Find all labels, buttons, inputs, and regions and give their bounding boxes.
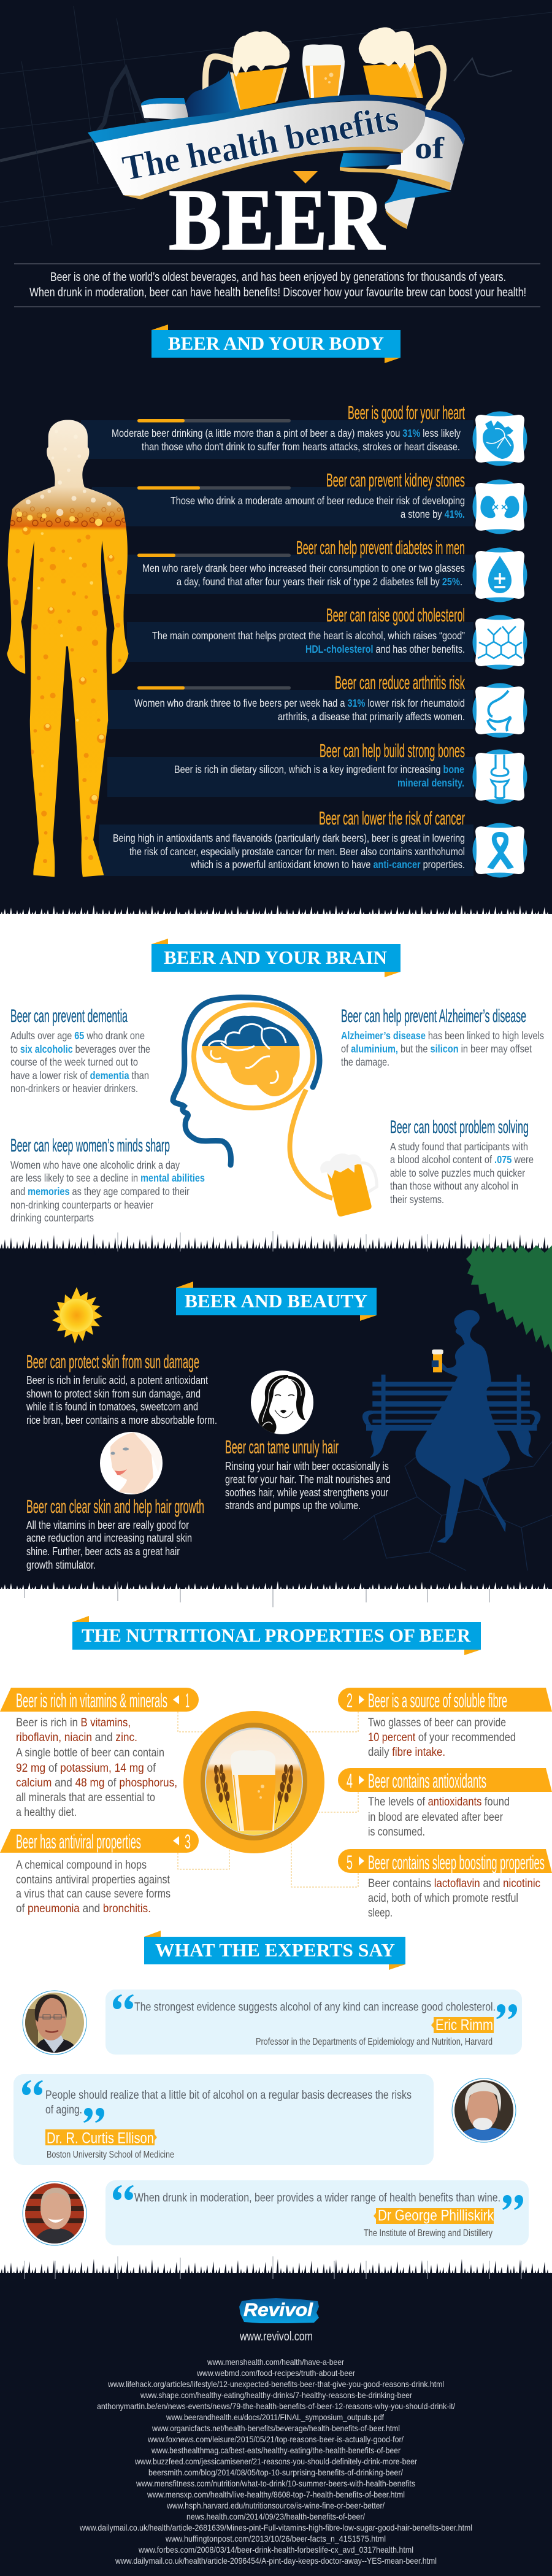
expert 2 quote: Dr. R. Curtis Ellison — [47, 2130, 154, 2147]
brain text: problem solving: a blood alcohol content of .075 were — [390, 1153, 534, 1166]
beauty text: hair: Beer can tame unruly hair — [225, 1436, 339, 1458]
label 1: vitamins and minerals: Beer is rich in vitamins & minerals — [16, 1690, 167, 1712]
nutrition text 3: of pneumonia and bronchitis. — [16, 1902, 151, 1915]
row 3: diabetes: a day, found that after four years their risk of type 2 diabetes fell by 25%. — [177, 575, 462, 588]
beauty text: sun damage: Beer can protect skin from sun damage — [26, 1351, 199, 1372]
title: The health benefits: The health benefits — [119, 98, 402, 188]
title: BEER: BEER — [169, 171, 386, 268]
revivol logo — [239, 2298, 319, 2323]
nutrition text 1: calcium and 48 mg of phosphorus, — [16, 1776, 177, 1790]
brain text: dementia: course of the week turned out to — [10, 1056, 138, 1068]
title: of: of — [415, 131, 445, 165]
divider thin spikes — [25, 2256, 521, 2279]
head outline yellow — [194, 1005, 332, 1198]
head outline blue — [173, 998, 320, 1165]
nutrition text 2: daily fibre intake. — [368, 1745, 445, 1759]
row 3: diabetes: Men who rarely drank beer who increased their consumption to one or two glasses — [142, 562, 465, 574]
connector lines — [178, 1712, 358, 1887]
title ribbon — [88, 71, 465, 229]
nutrition text 5: acid, both of which promote restful — [368, 1891, 518, 1905]
icon: heart — [472, 411, 527, 466]
brain text: dementia: to six alcoholic beverages over the — [10, 1043, 150, 1055]
label 3: antiviral: Beer has antiviral properties — [16, 1831, 141, 1853]
ribbon left fold — [141, 71, 240, 121]
references list: anthonymartin.be/en/news-events/news/79-the-health-benefits-of-beer-12-reasons-why-you-should-drink-it/ — [97, 2401, 455, 2411]
beauty text: hair: soothes hair, while yeast strengthens your — [225, 1486, 388, 1499]
nutrition text 1: all minerals that are essential to — [16, 1791, 155, 1804]
nutrition text 1: A single bottle of beer can contain — [16, 1746, 164, 1759]
icon: woman with wavy hair — [251, 1371, 313, 1434]
row 1: heart: than those who don't drink to suffer from hearts attacks, strokes or heart disease. — [142, 440, 460, 453]
beauty text: sun damage: Beer is rich in ferulic acid, a potent antioxidant — [26, 1374, 208, 1386]
woman — [415, 1310, 510, 1543]
nutrition text 4: is consumed. — [368, 1825, 425, 1839]
section heading: beer and beauty — [176, 1282, 377, 1321]
section heading: beer and your body — [151, 325, 401, 363]
references list: www.mensfitness.com/nutrition/what-to-drink/10-summer-beers-with-health-benefits — [136, 2478, 415, 2488]
brain text: women's minds — [10, 1136, 205, 1224]
row 4: cholesterol: HDL-cholesterol and has other benefits. — [305, 643, 465, 655]
beer mugs — [205, 27, 443, 112]
row 5: arthritis: arthritis, a disease that primarily affects women. — [278, 710, 465, 723]
icon: woman's clear skin — [100, 1429, 163, 1494]
section heading: nutritional properties — [72, 1616, 481, 1655]
beauty text: clear skin: acne reduction and increasing natural skin — [26, 1532, 192, 1544]
label 1: vitamins and minerals: 1 — [185, 1690, 190, 1712]
expert 3 photo — [23, 2182, 86, 2247]
expert 3 quote: The Institute of Brewing and Distillery — [364, 2228, 493, 2239]
nutrition text 3: contains antiviral properties against — [16, 1873, 170, 1886]
references list: www.menshealth.com/health/have-a-beer — [207, 2357, 344, 2367]
label 4: antioxidants: 4 — [347, 1770, 353, 1792]
ribbon right tail — [340, 109, 465, 229]
references list: www.lifehack.org/articles/lifestyle/12-unexpected-benefits-beer-that-give-you-good-reasons-drink.html — [107, 2379, 444, 2389]
heartbeat background — [0, 6, 552, 245]
row 1: heart: Moderate beer drinking (a little more than a pint of beer a day) makes you 31% less likely — [112, 427, 461, 439]
brain text: alzheimer's: of aluminium, but the silicon in beer may offset — [341, 1043, 532, 1055]
beauty text: clear skin: Beer can clear skin and help hair growth — [26, 1496, 204, 1517]
row 7: cancer: the risk of cancer, especially prostate cancer for men. Beer also contains xanthohumol — [129, 845, 465, 858]
brain text: women's minds: are less likely to see a decline in mental abilities — [10, 1172, 205, 1184]
row 3: diabetes — [137, 537, 465, 588]
icon: molecule — [472, 615, 527, 670]
tree foliage — [466, 1245, 552, 1353]
expert 2 photo — [452, 2078, 516, 2144]
references list: news.health.com/2014/09/23/health-benefits-of-beer/ — [186, 2512, 365, 2521]
bench — [362, 1375, 540, 1458]
expert 2 quote: People should realize that a little bit of alcohol on a regular basis decreases the risks — [45, 2089, 412, 2102]
brain text: dementia: Adults over age 65 who drank one — [10, 1029, 145, 1042]
references list: www.organicfacts.net/health-benefits/beverage/health-benefits-of-beer.html — [151, 2423, 400, 2433]
references list: beersmith.com/blog/2014/08/05/top-10-surprising-benefits-of-drinking-beer/ — [148, 2467, 403, 2477]
torn divider 2 — [0, 1234, 552, 1257]
section heading: beer and your body: BEER AND YOUR BODY — [168, 333, 384, 354]
row 2: kidney stones: Those who drink a moderate amount of beer reduce their risk of developing — [171, 494, 465, 507]
expert 2 quote — [13, 2074, 434, 2165]
beauty text: hair: strands and pumps up the volume. — [225, 1499, 361, 1512]
beauty text: hair — [225, 1436, 391, 1512]
head and brain graphic — [173, 998, 332, 1198]
left mug — [205, 31, 289, 110]
brain text: problem solving: their systems. — [390, 1193, 444, 1205]
brain text: dementia: non-drinkers or heavier drinkers. — [10, 1082, 138, 1094]
references list: www.webmd.com/food-recipes/truth-about-beer — [196, 2368, 355, 2378]
section heading: nutritional properties: THE NUTRITIONAL PROPERTIES OF BEER — [82, 1624, 471, 1646]
wheat ears — [214, 1764, 293, 1823]
row 7: cancer: which is a powerful antioxidant known to have anti-cancer properties. — [190, 858, 465, 871]
nutrition text 1: 92 mg of potassium, 14 mg of — [16, 1761, 156, 1775]
brain text: problem solving: A study found that participants with — [390, 1140, 528, 1153]
brain text: problem solving — [390, 1117, 534, 1205]
beauty text: sun damage: while it is found in tomatoes, sweetcorn and — [26, 1401, 198, 1413]
nutrition text 3 — [16, 1858, 171, 1915]
expert 3 quote — [105, 2180, 529, 2245]
divider thin spikes — [118, 1231, 489, 1251]
brain text: dementia: Beer can prevent dementia — [10, 1006, 128, 1026]
row 2: kidney stones — [137, 469, 465, 520]
label 3: antiviral — [0, 1829, 199, 1853]
expert 3 quote: Dr George Philliskirk — [378, 2207, 494, 2224]
beer glass — [231, 1750, 275, 1831]
label 2: soluble fibre: 2 — [347, 1690, 353, 1712]
ribbon gold edge — [123, 147, 403, 199]
references list: www.mensxp.com/health/live-healthy/8608-top-7-health-benefits-of-beer.html — [147, 2489, 405, 2499]
intro text — [14, 263, 540, 307]
row 4: cholesterol: The main component that helps protect the heart is alcohol, which raises “good” — [152, 629, 465, 642]
brain text: problem solving: able to solve puzzles much quicker — [390, 1167, 525, 1179]
references list: www.huffingtonpost.com/2013/10/26/beer-facts_n_4151575.html — [165, 2534, 386, 2543]
brain text: alzheimer's: the damage. — [341, 1056, 389, 1068]
nutrition text 1 — [16, 1716, 177, 1819]
label 3: antiviral: 3 — [185, 1831, 191, 1853]
beauty text: sun damage: shown to protect skin from sun damage, and — [26, 1388, 201, 1400]
expert 1 quote: Eric Rimm — [435, 2017, 493, 2034]
brain text: dementia — [10, 1006, 150, 1094]
nutrition text 5: sleep. — [368, 1906, 393, 1920]
nutrition text 1: riboflavin, niacin and zinc. — [16, 1731, 137, 1744]
row 7: cancer: Being high in antioxidants and flavanoids (particularly dark beers), beer is great in lowering — [113, 832, 465, 844]
brain text: alzheimer's — [341, 1006, 544, 1068]
row 6: bones — [174, 740, 465, 789]
expert 1 quote — [105, 1990, 522, 2055]
row 5: arthritis — [134, 672, 465, 723]
nutrition text 2: 10 percent of your recommended — [368, 1731, 516, 1744]
brain text: women's minds: drinking counterparts — [10, 1212, 94, 1224]
references list: www.hsph.harvard.edu/nutritionsource/is-wine-fine-or-beer-better/ — [166, 2501, 385, 2510]
website url: www.revivol.com — [239, 2330, 313, 2343]
section heading: beer and beauty: BEER AND BEAUTY — [185, 1290, 367, 1312]
beauty text: hair: Rinsing your hair with beer occasionally is — [225, 1460, 389, 1472]
orange triangle — [293, 171, 318, 183]
ground cracks — [343, 1436, 552, 1571]
icon: sun — [52, 1287, 102, 1344]
references list: www.buzzfeed.com/jessicamisener/21-reasons-you-should-definitely-drink-more-beer — [134, 2456, 417, 2466]
row 6: bones: Beer is rich in dietary silicon, which is a key ingredient for increasing bone — [174, 763, 464, 775]
expert 1 photo — [23, 1991, 86, 2055]
expert 1 quote: Professor in the Departments of Epidemiology and Nutrition, Harvard — [256, 2037, 493, 2047]
section heading: beer and your brain: BEER AND YOUR BRAIN — [164, 947, 387, 968]
nutrition text 1: a healthy diet. — [16, 1805, 77, 1819]
references list: www.shape.com/healthy-eating/healthy-drinks/7-healthy-reasons-be-drinking-beer — [140, 2390, 412, 2400]
icon: kidneys — [472, 480, 527, 534]
row 4: cholesterol — [152, 604, 465, 655]
icon: small beer mug — [318, 1147, 383, 1218]
row 5: arthritis: Women who drank three to five beers per week had a 31% lower risk for rheumatoid — [134, 697, 465, 709]
section heading: what the experts say — [144, 1931, 405, 1970]
section heading: what the experts say: WHAT THE EXPERTS SAY — [155, 1939, 395, 1961]
expert 2 quote: Boston University School of Medicine — [47, 2150, 174, 2160]
nutrition text 5: Beer contains lactoflavin and nicotinic — [368, 1877, 540, 1890]
rows background bands — [81, 420, 473, 876]
beauty text: sun damage: rice bran, beer contains a more absorbable form. — [26, 1414, 217, 1426]
references list — [79, 2357, 472, 2566]
beauty text: hair: great for your hair. The malt nourishes and — [225, 1474, 391, 1486]
torn divider 3 — [0, 1581, 552, 1594]
human body silhouette filled with beer — [7, 420, 129, 877]
row 1: heart — [112, 402, 465, 453]
references list: www.forbes.com/2008/03/14/beer-drink-health-forbeslife-cx_avd_0317health.html — [138, 2545, 413, 2555]
expert 2 quote: of aging. — [45, 2104, 82, 2117]
nutrition text 4: in blood are elevated after beer — [368, 1810, 503, 1824]
nutrition text 2: Two glasses of beer can provide — [368, 1716, 506, 1729]
nutrition text 3: a virus that can cause severe forms — [16, 1887, 171, 1901]
references list: www.beerandhealth.eu/docs/2011/FINAL_symposium_outputs.pdf — [166, 2412, 384, 2422]
brain text: women's minds: Beer can keep women’s minds sharp — [10, 1136, 170, 1156]
torn divider 4 — [0, 2259, 552, 2282]
ribbon main white strip — [95, 100, 425, 199]
references list: www.besthealthmag.ca/best-eats/healthy-eating/the-health-benefits-of-beer — [151, 2445, 401, 2455]
section heading: beer and your brain — [151, 939, 401, 977]
bench and woman silhouette — [362, 1310, 540, 1543]
nutrition text 4: The levels of antioxidants found — [368, 1795, 510, 1809]
divider thin spikes — [25, 1582, 489, 1607]
row 7: cancer — [113, 807, 465, 871]
brain text: dementia: have a lower risk of dementia than — [10, 1069, 149, 1082]
brain text: problem solving: than those without any alcohol in — [390, 1180, 518, 1192]
nutrition text 5 — [368, 1877, 540, 1920]
centre glass — [302, 44, 345, 98]
nutrition text 1: Beer is rich in B vitamins, — [16, 1716, 131, 1729]
revivol logo: Revivol — [243, 2300, 313, 2320]
brain text: women's minds: Women who have one alcoholic drink a day — [10, 1159, 180, 1171]
label 1: vitamins and minerals — [0, 1688, 199, 1712]
right mug — [359, 27, 443, 112]
icon: ribbon — [472, 823, 527, 877]
label 5: sleep: 5 — [347, 1851, 353, 1874]
nutrition text 2 — [368, 1716, 516, 1759]
icon: bone — [472, 750, 527, 804]
beauty text: clear skin: All the vitamins in beer are really good for — [26, 1519, 189, 1531]
beer medallion — [183, 1711, 324, 1853]
row 6: bones: mineral density. — [397, 777, 464, 789]
references list: www.dailymail.co.uk/health/article-2096454/A-pint-day-keeps-doctor-away--YES-mean-beer.html — [115, 2556, 437, 2566]
icon: blood sugar drop — [472, 547, 527, 602]
brain — [202, 1016, 299, 1046]
references list: www.dailymail.co.uk/health/article-2681639/Mines-pint-Full-vitamins-high-fibre-low-sugar-good-hair-benefits-beer.html — [79, 2523, 472, 2532]
nutrition text 4 — [368, 1795, 510, 1839]
icon: knee joint — [472, 683, 527, 737]
references list: www.foxnews.com/leisure/2015/05/21/top-reasons-beer-is-actually-good-for/ — [147, 2434, 404, 2444]
beer glass in hand — [432, 1350, 443, 1372]
ribbon blue edge — [88, 94, 426, 143]
row 2: kidney stones: a stone by 41%. — [401, 508, 465, 520]
brain text: women's minds: and memories as they age compared to their — [10, 1185, 190, 1198]
nutrition text 3: A chemical compound in hops — [16, 1858, 147, 1872]
beauty text: clear skin: growth stimulator. — [26, 1559, 96, 1571]
beauty text: sun damage — [26, 1351, 217, 1426]
beauty text: clear skin: shine. Further, beer acts as a great hair — [26, 1545, 180, 1558]
brain text: women's minds: non-drinking counterparts or heavier — [10, 1199, 153, 1211]
beauty text: clear skin — [26, 1496, 204, 1571]
torn divider 1 — [0, 905, 552, 920]
